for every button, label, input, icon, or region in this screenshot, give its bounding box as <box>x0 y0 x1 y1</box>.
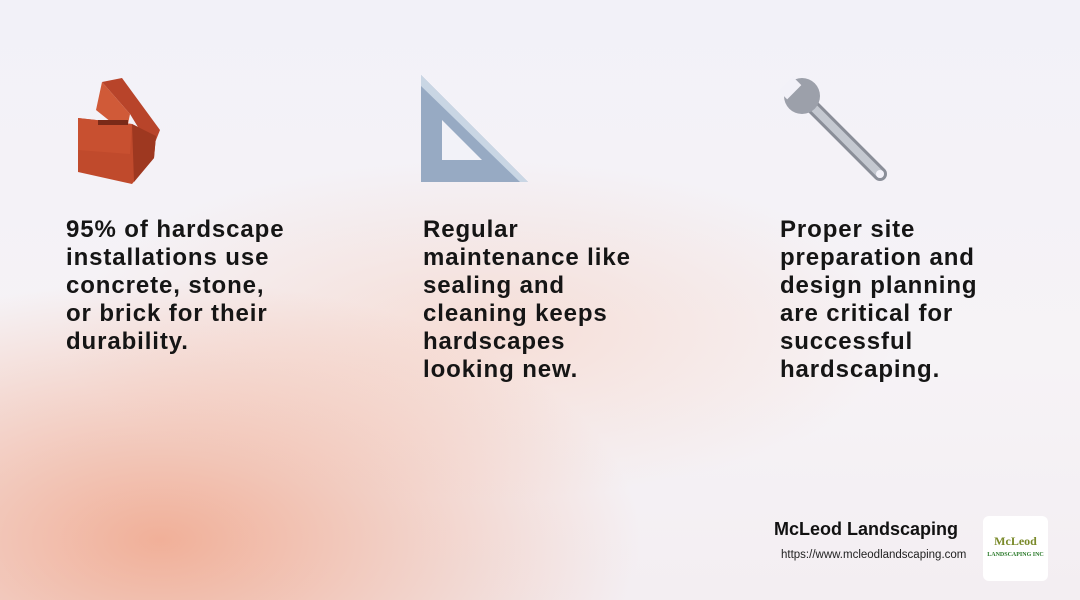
logo: McLeod <box>994 534 1037 548</box>
text: column 1: 95% of hardscape installations use concrete, stone, or brick for their durability. <box>66 216 284 355</box>
text: column 2: Regular maintenance like sealing and cleaning keeps hardscapes looking new. <box>423 216 631 383</box>
logo: LANDSCAPING INC <box>987 552 1044 558</box>
logo <box>983 516 1048 581</box>
text: column 3: Proper site preparation and design planning are critical for successful hardscaping. <box>780 216 978 383</box>
brand name: McLeod Landscaping <box>774 519 958 539</box>
icon: wrench <box>784 78 887 181</box>
icon: bricks <box>78 78 160 184</box>
brand url: https://www.mcleodlandscaping.com <box>781 549 966 561</box>
icon: set square <box>421 75 528 182</box>
